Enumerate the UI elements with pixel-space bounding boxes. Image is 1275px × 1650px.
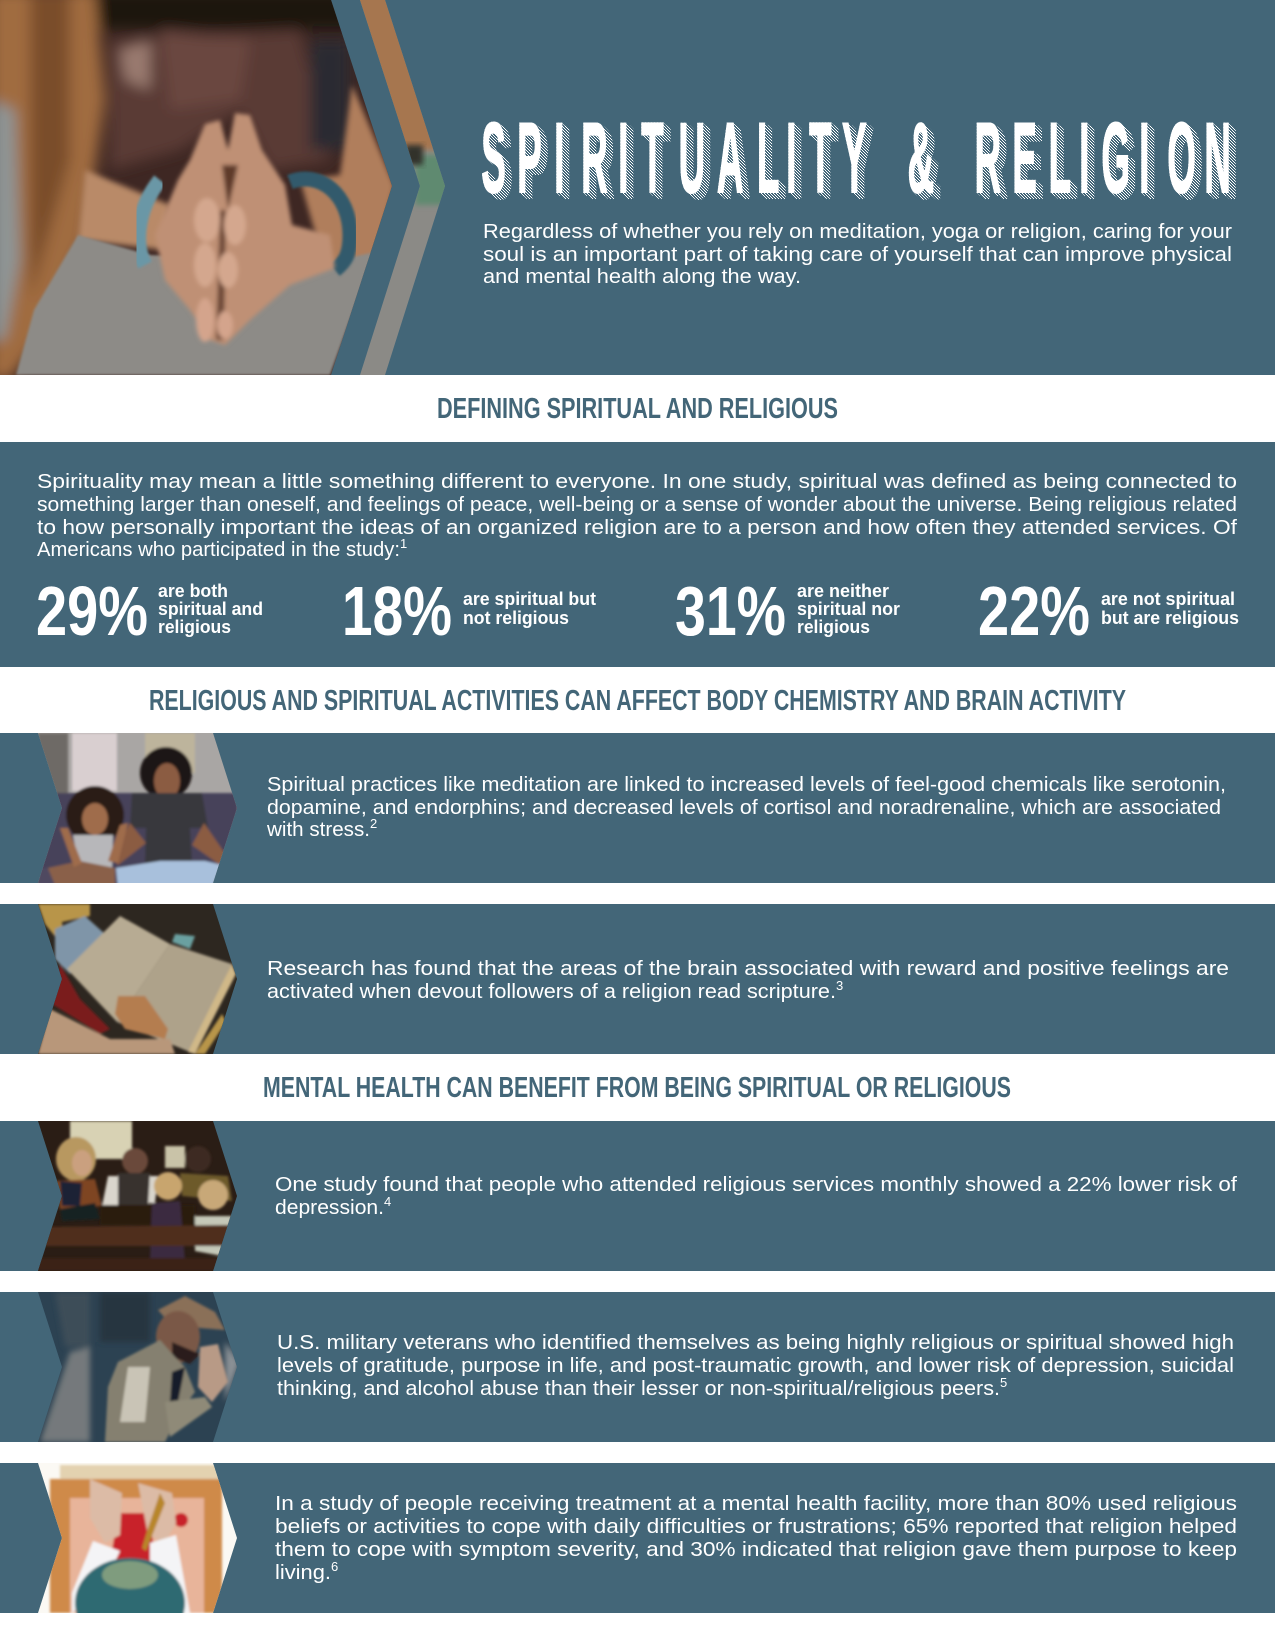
intro text: and mental health along the way. [483, 265, 801, 288]
text [277, 1331, 1234, 1400]
text [266, 773, 1226, 841]
stat: 22%: are not spiritual [1101, 589, 1235, 609]
stat: 18% [342, 572, 596, 650]
photo: hands raised over prayer rug [38, 1463, 237, 1613]
panel: services row [0, 1121, 1275, 1271]
text: depression. [275, 1196, 384, 1219]
text: 6 [331, 1559, 338, 1574]
stat: 31% [675, 572, 900, 650]
text: U.S. military veterans who identified themselves as being highly religious or spiritual showed high [277, 1331, 1234, 1354]
hero photo: praying hands [0, 0, 455, 380]
text: thinking, and alcohol abuse than their lesser or non-spiritual/religious peers. [277, 1377, 1000, 1400]
stat: 29% [36, 572, 263, 650]
text: 4 [384, 1194, 391, 1209]
text: In a study of people receiving treatment at a mental health facility, more than 80% used religious [275, 1492, 1237, 1515]
stat: 18%: 18% [342, 572, 452, 650]
title: SPIRITUALITY & RELIGION [481, 102, 1231, 213]
hands [155, 113, 335, 345]
text: One study found that people who attended religious services monthly showed a 22% lower risk of [275, 1173, 1237, 1196]
stat: 29%: spiritual and [158, 599, 263, 619]
text: 3 [836, 978, 843, 993]
panel: treatment row [0, 1463, 1275, 1613]
definition text: Americans who participated in the study: [37, 538, 400, 561]
stat: 29%: 29% [36, 572, 148, 650]
text: dopamine, and endorphins; and decreased levels of cortisol and noradrenaline, which are associated [267, 796, 1221, 819]
definition text: 1 [400, 536, 407, 551]
stat: 31%: are neither [797, 581, 889, 601]
text: them to cope with symptom severity, and 30% indicated that religion gave them purpose to keep [275, 1538, 1237, 1561]
left and right arms [76, 84, 392, 263]
text [275, 1173, 1237, 1219]
definition text: something larger than oneself, and feelings of peace, well-being or a sense of wonder about the universe. Being religious related [37, 493, 1237, 516]
panel: scripture row [0, 904, 1275, 1054]
text [267, 957, 1229, 1003]
panel: definition and statistics [0, 442, 1275, 667]
stat: 31%: 31% [675, 572, 786, 650]
text: living. [275, 1561, 331, 1584]
stat: 29%: are both [158, 581, 228, 601]
text: 5 [1000, 1375, 1007, 1390]
stat: 22%: 22% [978, 572, 1090, 650]
heading: mental health: MENTAL HEALTH CAN BENEFIT FROM BEING SPIRITUAL OR RELIGIOUS [263, 1072, 1011, 1104]
stat: 22%: but are religious [1101, 608, 1239, 628]
stat: 18%: are spiritual but [463, 589, 596, 609]
intro text [483, 220, 1232, 288]
text: activated when devout followers of a religion read scripture. [267, 980, 836, 1003]
definition text: to how personally important the ideas of an organized religion are to a person and how often they attended services. Of [37, 516, 1237, 539]
text [275, 1492, 1237, 1584]
photo: soldier praying [30, 1292, 240, 1442]
definition text: Spirituality may mean a little something different to everyone. In one study, spiritual was defined as being connected to [37, 470, 1237, 493]
header band [0, 0, 1275, 375]
heading: defining: DEFINING SPIRITUAL AND RELIGIOUS [437, 393, 838, 425]
text: Research has found that the areas of the brain associated with reward and positive feelings are [267, 957, 1229, 980]
stat: 31%: religious [797, 617, 870, 637]
definition text [37, 470, 1237, 561]
stat: 18%: not religious [463, 608, 569, 628]
panel: meditation row [0, 733, 1275, 888]
intro text: soul is an important part of taking care of yourself that can improve physical [483, 243, 1232, 266]
text: levels of gratitude, purpose in life, and post-traumatic growth, and lower risk of depression, suicidal [277, 1354, 1234, 1377]
panel: veterans row [0, 1292, 1275, 1442]
text: 2 [370, 816, 377, 831]
photo: mother and child meditating [30, 733, 240, 888]
stat: 29%: religious [158, 617, 231, 637]
intro text: Regardless of whether you rely on meditation, yoga or religion, caring for your [483, 220, 1232, 243]
bracelets [139, 180, 160, 265]
photo: hand on open book [30, 904, 240, 1054]
text: with stress. [266, 818, 370, 841]
photo: family in church pew [30, 1121, 240, 1271]
stat: 22% [978, 572, 1239, 650]
stat: 31%: spiritual nor [797, 599, 900, 619]
text: Spiritual practices like meditation are linked to increased levels of feel-good chemicals like serotonin, [267, 773, 1226, 796]
text: beliefs or activities to cope with daily difficulties or frustrations; 65% reported that religion helped [275, 1515, 1237, 1538]
